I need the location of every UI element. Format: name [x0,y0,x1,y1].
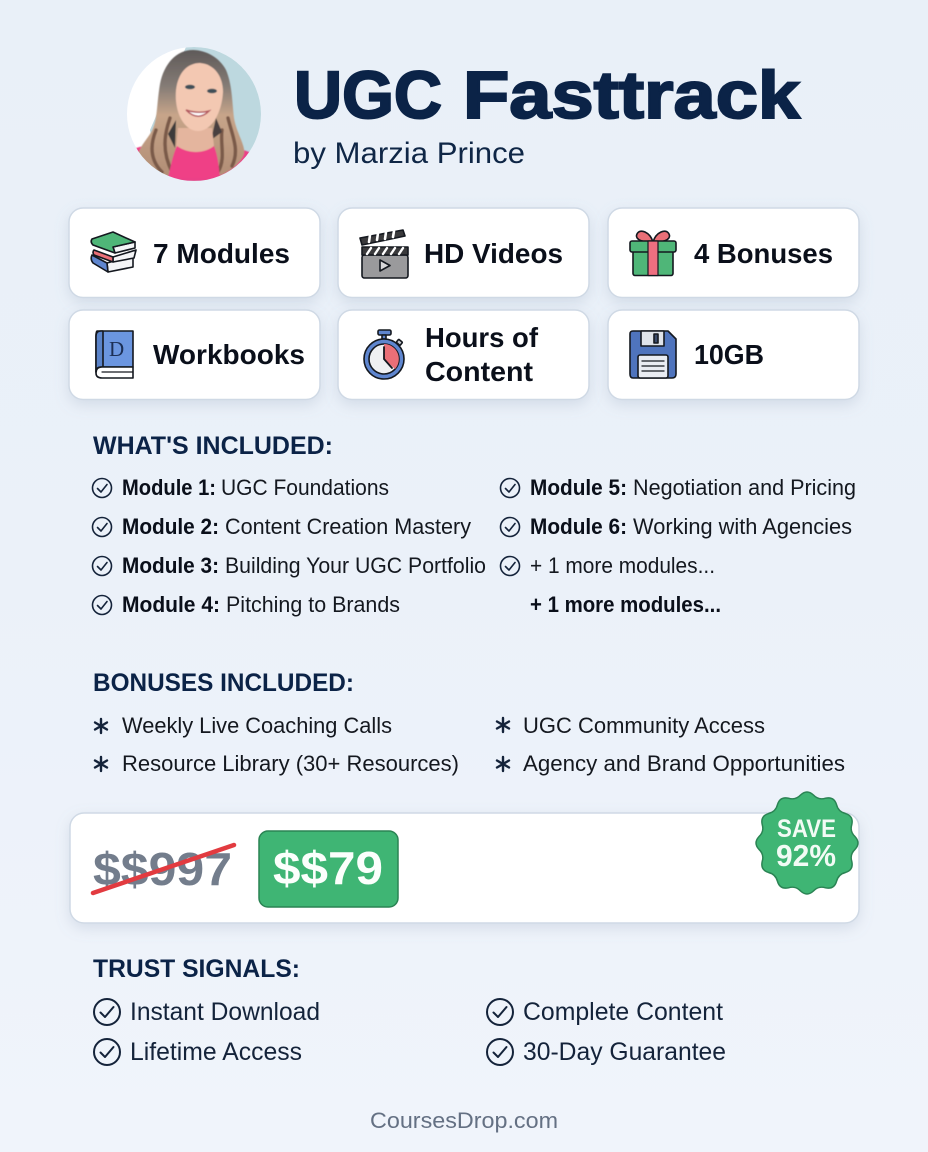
new price badge [259,831,398,907]
module 3: Building Your UGC Portfolio [225,553,486,578]
module 3: Module 3: [122,553,219,578]
feature card: 4 Bonuses: 4 Bonuses [694,238,833,269]
heading: what's included: WHAT'S INCLUDED: [93,432,333,460]
bonus: library: Resource Library (30+ Resources) [122,751,459,776]
feature card: Hours of Content [338,310,589,400]
save badge: 92% [776,838,836,873]
module list [92,475,856,617]
feature card: 10GB: 10GB [694,339,764,370]
feature card: 7 Modules [69,208,320,298]
icon: clapperboard [360,230,408,278]
feature card: 10GB [608,310,859,400]
subtitle: by Marzia Prince [293,137,525,170]
feature card: HD Videos: HD Videos [424,238,563,269]
module 2: Module 2: [122,514,219,539]
heading: trust signals: TRUST SIGNALS: [93,955,300,983]
feature card: 4 Bonuses [608,208,859,298]
title [294,58,801,133]
module 2: Content Creation Mastery [225,514,471,539]
module 6: Working with Agencies [633,514,852,539]
icon: floppy disk [630,331,676,378]
module 4: Pitching to Brands [226,592,400,617]
trust signals list [94,998,726,1066]
module 5: Module 5: [530,475,627,500]
panel: price [70,813,859,923]
module 1: Module 1: [122,475,216,500]
icon: workbook [96,331,133,378]
feature card: Workbooks [69,310,320,400]
trust: instant download: Instant Download [130,998,320,1026]
feature card: HD Videos [338,208,589,298]
feature card: Hours of Content: Hours of [425,322,539,353]
more modules: + 1 more modules... [530,553,715,578]
icon: stopwatch [364,330,404,379]
footer: CoursesDrop.com [370,1108,558,1133]
title: UGC [294,58,442,133]
strikethrough [93,845,234,893]
bonus: agency: Agency and Brand Opportunities [523,751,845,776]
trust: guarantee: 30-Day Guarantee [523,1038,726,1066]
heading: bonuses included: BONUSES INCLUDED: [93,669,354,697]
module 1 [92,475,389,500]
bonus: coaching: Weekly Live Coaching Calls [122,713,392,738]
module 2 [92,514,471,539]
more modules bold: + 1 more modules... [530,592,721,617]
module 6 [500,514,852,539]
module 6: Module 6: [530,514,627,539]
trust: complete content: Complete Content [523,998,723,1026]
bonus: community: UGC Community Access [523,713,765,738]
module 4: Module 4: [122,592,220,617]
feature card: Workbooks: D [109,337,124,361]
bonuses list [95,713,845,776]
icon: stack of books [91,232,136,272]
save badge [756,792,858,894]
feature card: 7 Modules: 7 Modules [153,238,290,269]
save badge: SAVE [777,815,836,843]
feature card: Workbooks: Workbooks [153,339,305,370]
module 3 [92,553,486,578]
feature card: Hours of Content: Content [425,356,533,387]
module 5 [500,475,856,500]
title: Fasttrack [463,58,801,133]
module 4 [92,592,400,617]
icon: gift box [630,231,676,276]
trust: lifetime access: Lifetime Access [130,1038,302,1066]
portrait photo [127,47,261,181]
panel: price: $$79 [273,842,383,894]
module 5: Negotiation and Pricing [633,475,856,500]
module 1: UGC Foundations [221,475,389,500]
old price: $$997 [93,843,232,895]
